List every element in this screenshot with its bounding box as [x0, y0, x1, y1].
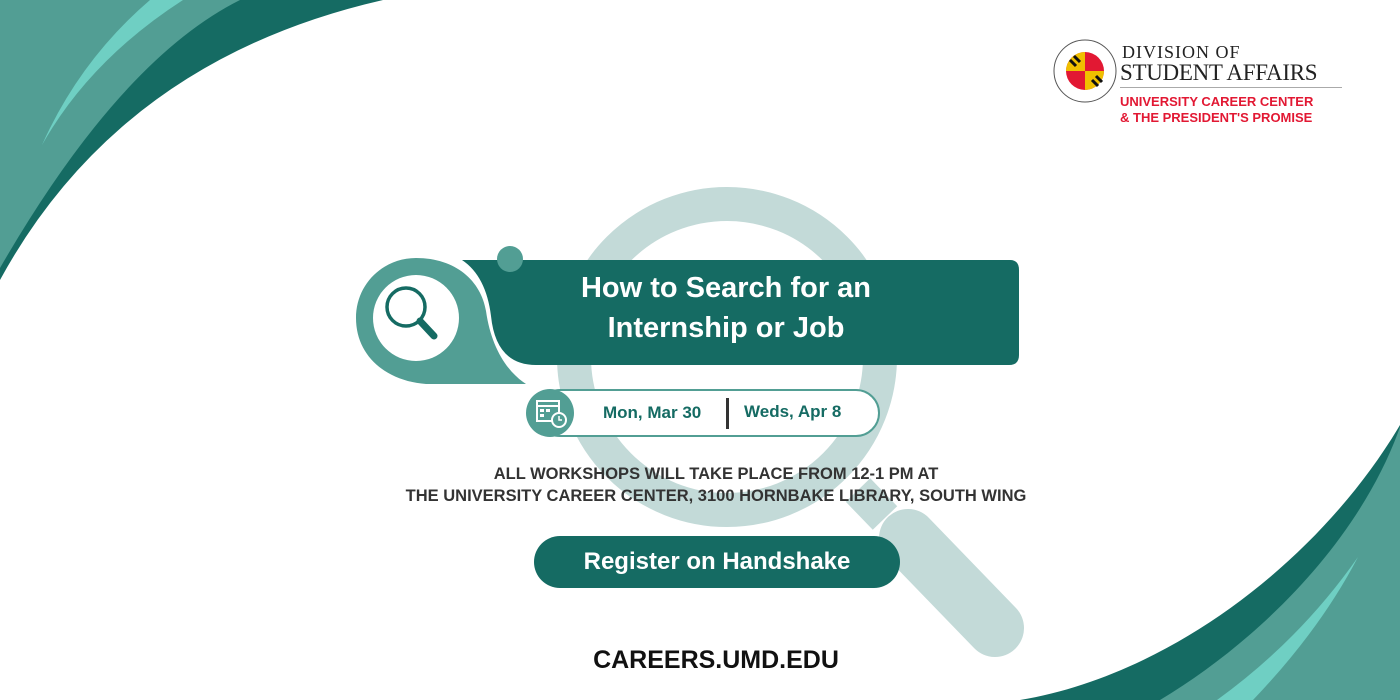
dates: Mon, Mar 30	[603, 403, 701, 422]
register button	[534, 536, 900, 588]
location text	[406, 465, 1026, 505]
logo	[1054, 40, 1342, 125]
date pill: Weds, Apr 8	[744, 402, 841, 421]
location text: THE UNIVERSITY CAREER CENTER, 3100 HORNBAKE LIBRARY, SOUTH WING	[406, 487, 1026, 505]
logo text: DIVISION OF	[1122, 42, 1240, 62]
swoosh bottom-right	[1020, 425, 1400, 700]
icon: calendar	[526, 389, 574, 437]
pin shape	[356, 258, 526, 384]
title panel	[356, 246, 1019, 384]
title text	[581, 272, 871, 344]
logo: STUDENT AFFAIRS	[1120, 60, 1317, 85]
logo: & THE PRESIDENT'S PROMISE	[1120, 110, 1312, 125]
swoosh top-left	[0, 0, 383, 280]
logo: UNIVERSITY CAREER CENTER	[1120, 94, 1313, 109]
website: CAREERS.UMD.EDU	[593, 646, 839, 674]
background magnifier	[574, 204, 995, 628]
title text: Internship or Job	[608, 312, 844, 344]
title text: How to Search for an	[581, 272, 871, 304]
register button: Register on Handshake	[584, 548, 850, 575]
location text: ALL WORKSHOPS WILL TAKE PLACE FROM 12-1 PM AT	[494, 465, 938, 483]
icon: seal	[1054, 40, 1116, 102]
date pill	[526, 389, 880, 437]
